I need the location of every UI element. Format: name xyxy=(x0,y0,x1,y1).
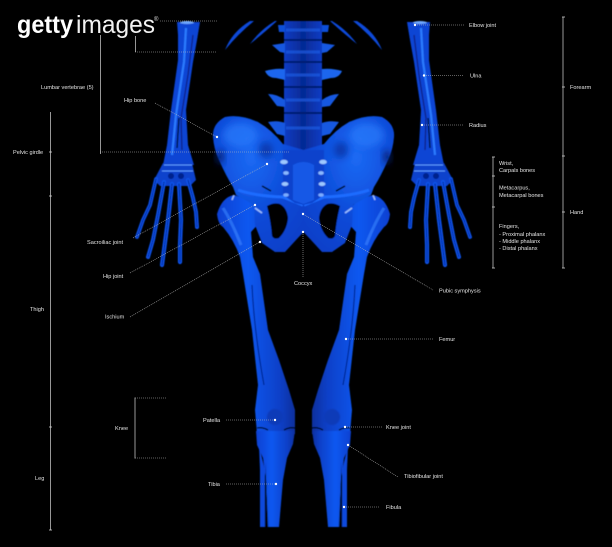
skeleton illustration xyxy=(137,21,470,527)
spine xyxy=(284,21,322,151)
label: radius xyxy=(421,123,487,129)
label: elbow joint xyxy=(414,23,496,29)
logo: images xyxy=(76,11,155,39)
knee bracket xyxy=(115,398,167,458)
metacarpus text: Metacarpus, xyxy=(499,186,530,192)
label: ulna: Ulna xyxy=(470,74,482,80)
label: pubic symphysis xyxy=(302,213,481,294)
fingers text: - Proximal phalanx xyxy=(499,232,546,238)
label: knee joint xyxy=(344,425,411,431)
left range lines: Thigh xyxy=(30,307,44,313)
logo xyxy=(17,11,159,39)
label: elbow joint: Elbow joint xyxy=(469,23,496,29)
label: ischium xyxy=(105,241,261,320)
hand sub-ranges xyxy=(492,157,546,268)
forearm and hand range line xyxy=(562,17,591,268)
wrist text: Wrist, xyxy=(499,161,513,167)
label: hip bone xyxy=(124,98,218,138)
left range lines: Leg xyxy=(35,476,44,482)
label: hip bone: Hip bone xyxy=(124,98,146,104)
label: hip joint xyxy=(103,204,256,280)
label: patella: Patella xyxy=(203,418,221,424)
label: tibia xyxy=(208,482,277,488)
fingers text: Fingers, xyxy=(499,224,519,230)
fingers text: - Middle phalanx xyxy=(499,239,540,245)
label: fibula: Fibula xyxy=(386,505,402,511)
label: hip joint: Hip joint xyxy=(103,274,124,280)
left range lines xyxy=(13,112,52,530)
label: coccyx: Coccyx xyxy=(294,281,313,287)
right half of bones xyxy=(304,21,470,527)
label: pubic symphysis: Pubic symphysis xyxy=(439,288,481,294)
label: patella xyxy=(203,418,276,424)
lumbar vertebrae bracket xyxy=(41,21,290,154)
label: femur: Femur xyxy=(439,337,455,343)
left half of bones xyxy=(137,21,304,527)
left range lines: Pelvic girdle xyxy=(13,150,43,156)
label: radius: Radius xyxy=(469,123,487,129)
label: femur xyxy=(345,337,455,343)
label: ulna xyxy=(423,74,482,80)
label: tibiofibular joint: Tibiofibular joint xyxy=(404,474,443,480)
fingers text: - Distal phalanx xyxy=(499,246,538,252)
label: sacroiliac joint xyxy=(87,163,268,246)
logo: ® xyxy=(154,16,159,23)
logo: getty xyxy=(17,11,73,39)
label: fibula xyxy=(343,505,402,511)
label: ischium: Ischium xyxy=(105,314,125,320)
forearm and hand range line: Forearm xyxy=(570,85,591,91)
lumbar vertebrae bracket: Lumbar vertebrae (5) xyxy=(41,85,94,91)
label: tibiofibular joint xyxy=(347,444,443,480)
forearm and hand range line: Hand xyxy=(570,210,583,216)
label: coccyx xyxy=(294,231,313,287)
label: tibia: Tibia xyxy=(208,482,221,488)
wrist text: Carpals bones xyxy=(499,168,535,174)
metacarpus text: Metacarpal bones xyxy=(499,193,544,199)
knee bracket: Knee xyxy=(115,426,128,432)
label: sacroiliac joint: Sacroiliac joint xyxy=(87,240,124,246)
label: knee joint: Knee joint xyxy=(386,425,411,431)
